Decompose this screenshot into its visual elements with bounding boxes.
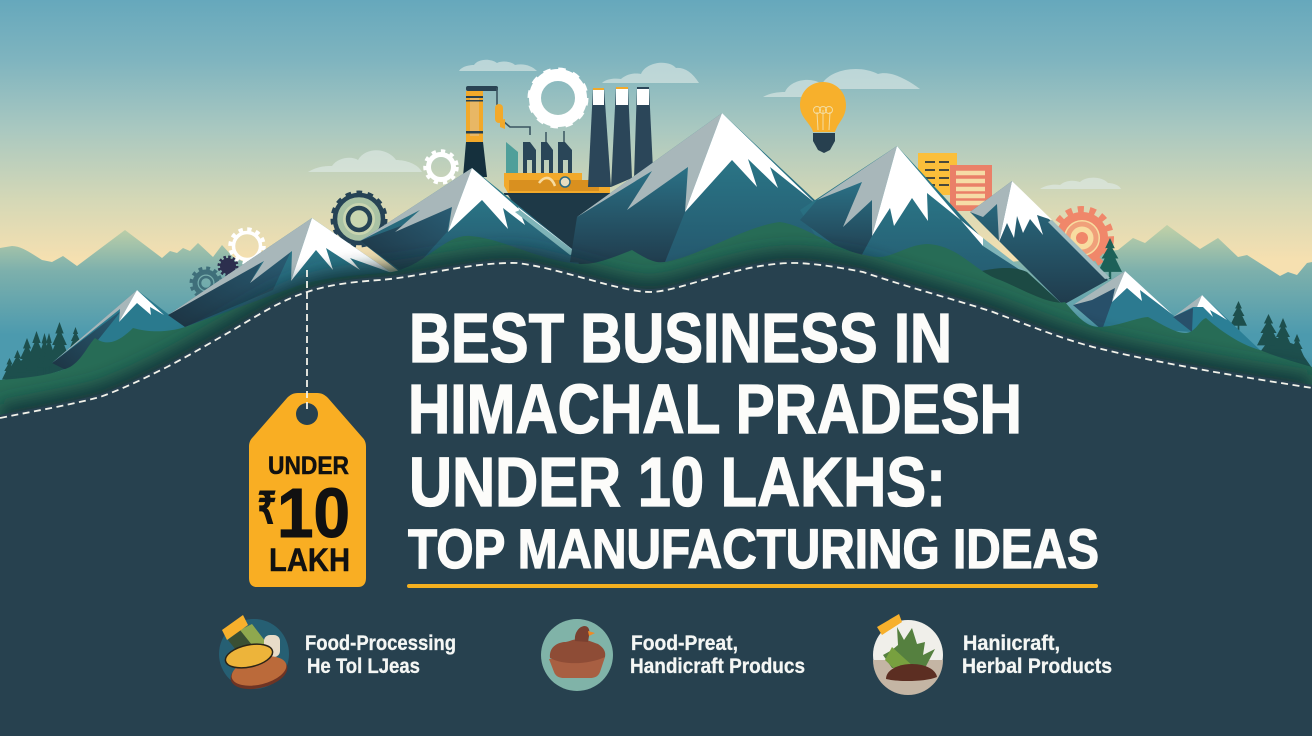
title line 1: BEST BUSINESS IN xyxy=(409,299,952,377)
item: food processing xyxy=(219,615,456,695)
label: food preat xyxy=(630,632,805,678)
price tag xyxy=(249,270,366,587)
mountain: sixth peak xyxy=(1173,295,1260,350)
tree by gear xyxy=(1098,238,1122,279)
gear: orange xyxy=(1054,210,1110,266)
factory small buildings xyxy=(506,131,572,173)
icon: basket xyxy=(541,619,613,691)
trees right xyxy=(1230,301,1312,368)
dashed trail xyxy=(0,263,1312,418)
mountain: main peak xyxy=(570,113,880,270)
title line 4: TOP MANUFACTURING IDEAS xyxy=(408,517,1099,580)
dark valley xyxy=(973,268,1062,307)
label: food processing: He Tol LJeas xyxy=(307,655,420,678)
mountain: third peak xyxy=(800,146,1045,300)
gear: navy xyxy=(333,193,385,245)
clouds xyxy=(308,60,1121,189)
tag string xyxy=(306,270,308,413)
label: food processing: Food-Processing xyxy=(305,632,456,655)
label: food processing xyxy=(305,632,456,678)
tag text: lakh: LAKH xyxy=(269,542,350,578)
mountain: fourth peak xyxy=(970,181,1110,305)
label: food preat: Handicraft Producs xyxy=(630,655,805,678)
icon: food xyxy=(219,615,291,695)
mountain: left large xyxy=(168,218,400,327)
factory xyxy=(463,86,653,195)
gear: white left xyxy=(230,230,264,262)
navy ground panel xyxy=(0,260,1312,736)
item: food preat xyxy=(541,619,805,691)
gear: dark small xyxy=(219,257,237,275)
mountain: factory peak xyxy=(360,168,580,272)
green hills xyxy=(0,222,1312,420)
label: food preat: Food-Preat, xyxy=(631,632,738,655)
title xyxy=(408,299,1099,580)
title line 2: HIMACHAL PRADESH xyxy=(408,370,1022,448)
icon: herb plant xyxy=(873,614,943,695)
gold underline xyxy=(407,584,1098,588)
tag text: rupee sign: ₹ xyxy=(257,482,277,534)
icon: light bulb xyxy=(800,82,846,153)
tag text: 10: 10 xyxy=(277,474,350,552)
gear: small white xyxy=(426,152,456,182)
tag text: under: UNDER xyxy=(268,452,349,480)
buildings: yellow and coral xyxy=(918,153,992,211)
label: herbal: Herbal Products xyxy=(962,655,1112,678)
title line 3: UNDER 10 LAKHS: xyxy=(409,443,946,521)
distant hills xyxy=(0,225,1312,420)
trees left xyxy=(2,322,82,384)
factory base xyxy=(504,173,610,195)
factory tower xyxy=(463,86,530,177)
label: herbal xyxy=(962,632,1112,678)
factory chimneys xyxy=(588,87,653,187)
mountain: left small xyxy=(52,290,185,372)
mountain range xyxy=(52,113,1260,372)
navy mound under factory xyxy=(508,195,660,290)
gear: large white xyxy=(531,71,585,125)
mountain: fifth peak xyxy=(1073,271,1192,332)
gear: teal grey xyxy=(192,268,220,298)
label: herbal: Haniıcraft, xyxy=(963,632,1060,655)
item: herbal xyxy=(873,614,1112,695)
green shading xyxy=(0,263,1312,418)
